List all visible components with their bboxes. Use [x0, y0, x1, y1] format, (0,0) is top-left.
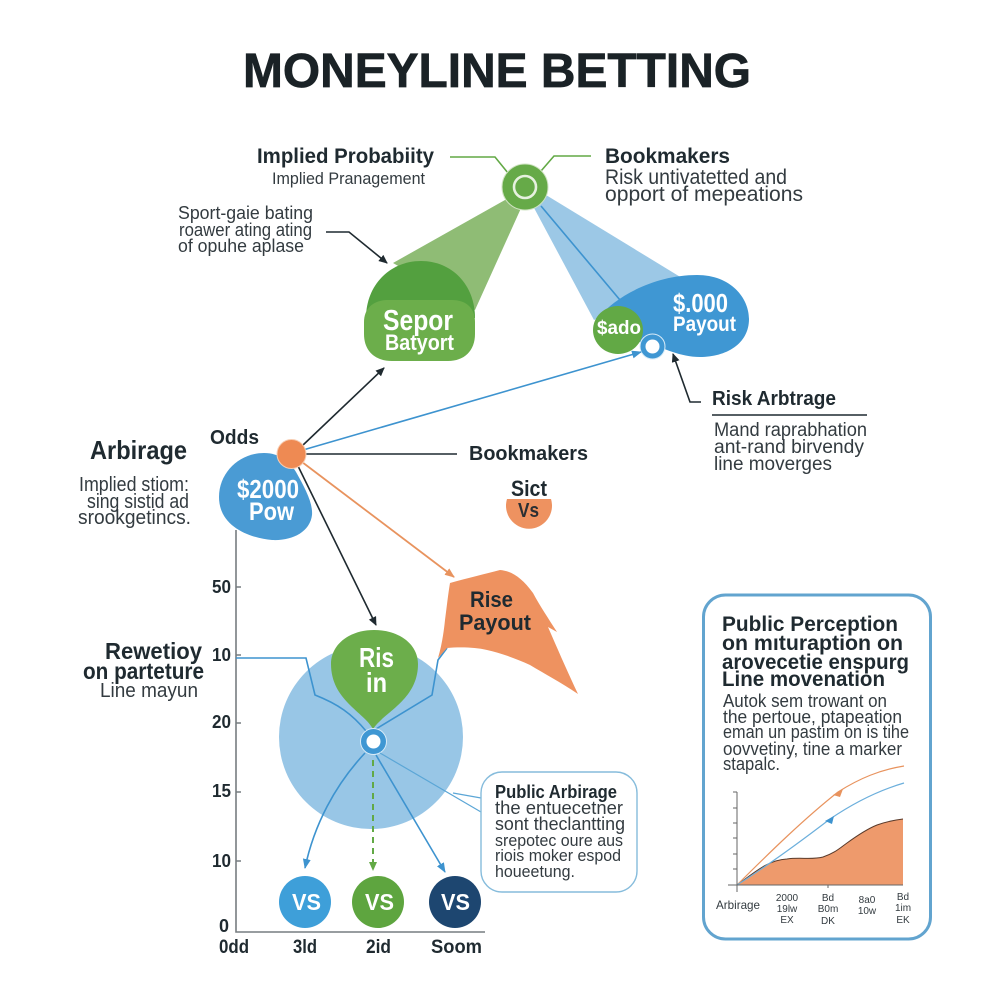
- green sport bubble: [364, 261, 475, 361]
- blue cone: [533, 195, 682, 320]
- text: sports betting note: roawer ating ating: [179, 220, 312, 240]
- bottom hub ring: [360, 728, 386, 754]
- panel body text: Autok sem trowant on: [723, 691, 887, 711]
- area chart labels: DK: [821, 916, 835, 927]
- x axis labels: 2id: [366, 937, 391, 958]
- big blue payout blob: $2000: [237, 474, 299, 504]
- orange rise payout flag: [438, 570, 578, 694]
- arrow: risk arbitrage to ring: [673, 354, 701, 402]
- text: risk arbitrage: [712, 388, 867, 475]
- text: sports betting note: of opuhe aplase: [178, 236, 304, 256]
- text: risk arbitrage: line moverges: [714, 454, 832, 475]
- y axis labels: 10: [212, 645, 231, 665]
- green small bubble: $ado: [597, 318, 641, 339]
- leader: implied probability: [450, 157, 508, 173]
- panel body text: eman un pastım on is tihe: [723, 722, 909, 742]
- text: rewetioy: [83, 638, 204, 702]
- VS circle blue: [279, 876, 331, 928]
- connector lines into hub: [236, 648, 447, 731]
- y axis labels: 50: [212, 577, 231, 597]
- line: odds to bookmakers: [303, 453, 457, 455]
- text: bookmakers top: Risk untivatetted and: [605, 166, 787, 189]
- callout connector: [380, 753, 481, 812]
- panel heading: [722, 613, 909, 691]
- text: rewetioy: Rewetioy: [105, 638, 202, 664]
- y axis labels: [212, 577, 231, 936]
- area chart labels: 19lw: [777, 904, 798, 915]
- area chart labels: EK: [896, 915, 910, 926]
- arrow: hub to navy VS: [376, 755, 445, 872]
- text: arbirage: srookgetincs.: [78, 507, 191, 529]
- x axis labels: 3ld: [293, 937, 317, 958]
- leader: bookmakers: [541, 156, 591, 171]
- text: arbirage: Arbirage: [90, 435, 187, 465]
- callout: public arbirage: [481, 772, 637, 892]
- y axis labels: 15: [212, 781, 231, 801]
- text: rewetioy: Line mayun: [100, 680, 198, 702]
- VS circle blue: VS: [292, 889, 321, 915]
- panel heading: Public Perception: [722, 613, 898, 636]
- area chart labels: Arbirage: [716, 898, 760, 912]
- chart axes: [212, 530, 485, 958]
- orange vs badge: [506, 476, 552, 529]
- text: implied probability: [257, 145, 434, 188]
- area chart labels: 1im: [895, 903, 911, 914]
- arrow: odds to payout: [303, 352, 641, 450]
- y axis labels: 20: [212, 712, 231, 732]
- green teardrop bubble: Ris: [359, 642, 394, 673]
- text: bookmakers top: Bookmakers: [605, 145, 730, 168]
- hub icon: [502, 164, 548, 210]
- ring marker: [640, 334, 665, 359]
- panel body text: the pertoue, ptapeation: [723, 707, 902, 727]
- panel heading: arovecetie enspurg: [722, 651, 909, 674]
- area chart: [728, 766, 904, 892]
- arrow: odds to rise payout: [302, 462, 454, 577]
- blue payout bubble: [598, 275, 749, 357]
- x axis labels: Soom: [431, 937, 482, 958]
- text: arbirage: sing sistid ad: [87, 491, 189, 513]
- x axis labels: 0dd: [219, 937, 249, 958]
- text: arbirage: Implied stiom:: [79, 474, 189, 496]
- green teardrop bubble: in: [366, 667, 387, 698]
- panel body text: [723, 691, 909, 774]
- text: sports betting note: [178, 203, 313, 256]
- VS circle navy: [429, 876, 481, 928]
- panel heading: Line movenation: [722, 668, 885, 691]
- area chart labels: B0m: [818, 904, 838, 915]
- blue payout bubble: $.000: [673, 288, 728, 318]
- area chart labels: 8a0: [859, 895, 876, 906]
- callout: public arbirage: the entuecetner: [495, 798, 623, 818]
- panel: public perception: [704, 595, 930, 939]
- panel: top hub diagram: [364, 156, 749, 361]
- text: bookmakers top: opport of mepeations: [605, 183, 803, 206]
- arrow: odds to risk bubble: [298, 466, 376, 625]
- green sport bubble: Batyort: [385, 330, 455, 355]
- arrow: hub to green VS: [372, 760, 374, 870]
- cone centre line: [541, 206, 620, 300]
- green teardrop bubble: [331, 630, 418, 729]
- green cone: [393, 196, 522, 310]
- title: MONEYLINE BETTING: [243, 45, 751, 98]
- arrow: note to green bubble: [326, 232, 387, 263]
- big blue payout blob: Pow: [249, 498, 294, 526]
- text: implied probability: Implied Pranagement: [272, 169, 425, 188]
- panel body text: stapalc.: [723, 754, 780, 774]
- y axis ticks: [236, 587, 241, 861]
- label: bookmakers middle: Bookmakers: [469, 443, 588, 465]
- callout: public arbirage: Public Arbirage: [495, 782, 617, 802]
- orange rise payout flag: Payout: [459, 610, 532, 635]
- x axis labels: [219, 937, 482, 958]
- area chart labels: 2000: [776, 893, 799, 904]
- text: implied probability: Implied Probabiity: [257, 145, 434, 168]
- area chart labels: Bd: [822, 893, 834, 904]
- big blue payout blob: [219, 453, 312, 540]
- VS circle green: VS: [365, 889, 394, 915]
- arrow: hub to blue VS: [305, 753, 365, 868]
- area chart labels: EX: [780, 915, 794, 926]
- orange rise payout flag: Rise: [470, 587, 513, 612]
- callout: public arbirage: houeetung.: [495, 862, 575, 881]
- orange vs badge: Sict: [511, 476, 548, 501]
- text: sports betting note: Sport-gaie bating: [178, 203, 313, 223]
- orange vs badge: Vs: [518, 500, 539, 522]
- blue payout bubble: Payout: [673, 313, 736, 336]
- text: risk arbitrage: Risk Arbtrage: [712, 388, 836, 410]
- blue circle: [279, 645, 463, 829]
- callout: public arbirage: srepotec oure aus: [495, 831, 623, 850]
- area chart labels: [716, 892, 911, 927]
- orange node: [277, 440, 306, 468]
- text: risk arbitrage: ant-rand birvendy: [714, 437, 864, 458]
- y axis labels: 0: [219, 916, 229, 936]
- arrow: odds to green bubble: [302, 368, 384, 446]
- panel heading: on mıturaption on: [722, 632, 903, 655]
- green small bubble: [593, 306, 643, 354]
- label: odds: Odds: [210, 427, 259, 449]
- area chart labels: Bd: [897, 892, 909, 903]
- text: arbirage: [78, 435, 191, 529]
- text: rewetioy: on parteture: [83, 658, 204, 684]
- VS circle green: [352, 876, 404, 928]
- VS circle navy: VS: [441, 889, 470, 915]
- y axis labels: 10: [212, 851, 231, 871]
- callout: public arbirage: riois moker espod: [495, 846, 621, 865]
- green sport bubble: Sepor: [383, 305, 453, 337]
- text: bookmakers top: [605, 145, 803, 206]
- callout: public arbirage: sont theclantting: [495, 814, 625, 834]
- text: risk arbitrage: Mand raprabhation: [714, 420, 867, 441]
- panel body text: oovvetiny, tine a marker: [723, 739, 902, 759]
- area chart labels: 10w: [858, 906, 877, 917]
